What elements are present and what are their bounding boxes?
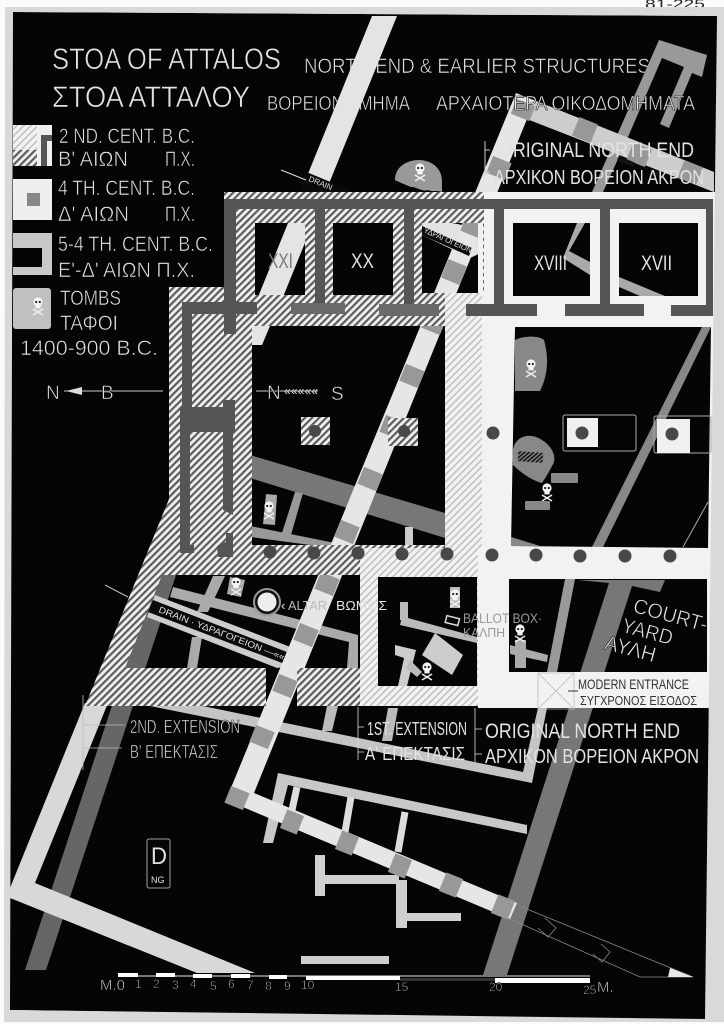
tomb in court	[263, 494, 277, 525]
gray walls of the 2nd century stoa	[180, 199, 713, 557]
lower left stub	[187, 637, 202, 668]
legend text: 4 TH. CENT. B.C.	[58, 177, 195, 200]
pier outline east court 2	[654, 416, 711, 453]
legend text: TOMBS	[60, 287, 121, 310]
gray wall in room XVIII	[563, 223, 590, 275]
inner north structure	[263, 773, 527, 843]
scale bar: 25	[583, 983, 597, 997]
original north end wall	[145, 705, 547, 783]
ballot box greek: ΚΑΛΠΗ	[463, 625, 505, 640]
wall stubs	[322, 706, 338, 731]
main title greek: ΣΤΟΑ ΑΤΤΑΛΟΥ	[52, 81, 250, 114]
ballot box label: BALLOT BOX·	[463, 610, 542, 626]
large gray wall right	[483, 580, 665, 975]
room numerals: XVII	[641, 252, 672, 275]
drain black notch	[452, 223, 483, 232]
drain label in room XIX	[422, 226, 472, 256]
legend text: Δ' ΑΙΩΝ	[58, 203, 129, 226]
lower right post	[515, 640, 526, 668]
legend swatch tombs	[13, 288, 51, 329]
main title english: STOA OF ATTALOS	[52, 43, 281, 76]
second extension label	[83, 695, 240, 770]
partition bar XXI-XX	[291, 303, 345, 314]
north arrow greek: B	[101, 383, 114, 404]
lower isolated walls	[315, 855, 461, 928]
dark hatched extension	[85, 192, 484, 706]
court stub	[282, 492, 303, 535]
first extension label: Α' ΕΠΕΚΤΑΣΙΣ	[365, 744, 465, 764]
skull right room	[422, 662, 432, 680]
scale bar: 7	[247, 978, 254, 992]
long chain wall with gray blocks	[226, 93, 714, 919]
right room block	[422, 633, 463, 675]
drain black strip	[148, 600, 292, 666]
courtyard thin wall	[547, 579, 575, 672]
legend text: 5-4 TH. CENT. B.C.	[58, 233, 213, 256]
legend swatch 4th century	[13, 179, 52, 220]
partition bar XVIII-XVII	[565, 304, 644, 316]
tomb court east upper	[515, 337, 547, 391]
pier white 2	[657, 419, 690, 453]
tail projected north end of chain	[510, 905, 693, 977]
north arrow court: «««««	[284, 384, 318, 398]
courtyard label: YARD	[619, 614, 675, 650]
inner stubs	[292, 787, 405, 852]
drain label band in room XIX	[422, 223, 483, 258]
scale bar: 9	[284, 979, 291, 993]
modern entrance	[538, 673, 697, 709]
north wall upper	[182, 302, 192, 407]
second extension wall	[10, 703, 255, 973]
tomb top	[395, 160, 442, 192]
signature monogram	[147, 839, 170, 888]
scale bar: 8	[265, 979, 272, 993]
north arrow court: N	[267, 383, 281, 404]
modern entrance: MODERN ENTRANCE	[578, 676, 689, 692]
tomb court east lower	[512, 436, 554, 483]
altar label: ‹	[281, 598, 285, 613]
skull lower right	[515, 624, 525, 642]
north thick bar	[180, 400, 235, 432]
top arm of the chain wall in lighter gray	[527, 101, 714, 192]
left room wall	[224, 199, 236, 334]
drain channel	[147, 595, 300, 668]
scale bar: 20	[489, 980, 503, 994]
scale bar: 15	[395, 980, 409, 994]
room numerals: XXI	[268, 250, 293, 273]
ballot box	[445, 616, 460, 626]
signature monogram: NG	[151, 875, 164, 885]
lower left room band	[170, 587, 358, 668]
legend swatch 2nd century	[13, 125, 52, 166]
partition wall XVIII-XVII	[600, 199, 610, 305]
pier outline east court 1	[563, 415, 636, 451]
original north end label lower	[485, 720, 699, 768]
north inner wall	[223, 432, 233, 515]
original north end label top: ORIGINAL NORTH END	[499, 139, 694, 162]
room numerals	[268, 250, 672, 275]
legend text: Π.Χ.	[165, 203, 195, 226]
north arrow greek	[46, 383, 163, 404]
legend swatch 5-4th century	[13, 233, 52, 275]
drain text in room XIX: ΥΔΡΑΓΟΓΕΙΟΝ	[422, 226, 474, 255]
gray wall in room XVII	[619, 277, 665, 296]
right room lower wall	[395, 645, 416, 686]
right room band	[400, 612, 477, 643]
right room stub	[400, 602, 408, 620]
scale bar: 5	[210, 979, 217, 993]
second extension label: Β' ΕΠΕΚΤΑΣΙΣ	[130, 742, 218, 762]
light hatched extension	[360, 293, 482, 706]
partition bar XX-XIX	[379, 304, 439, 316]
courtyard label: COURT-	[631, 595, 710, 636]
partition bar XIX-XVIII	[466, 304, 537, 316]
wall stub	[382, 708, 398, 741]
scale bar: M.	[597, 979, 614, 996]
skull with bars	[525, 473, 578, 510]
legend text: Ε'-Δ' ΑΙΩΝ Π.Χ.	[58, 259, 195, 282]
pier west	[301, 417, 330, 445]
room numerals: XVIII	[534, 252, 567, 275]
drain pointer at top	[281, 170, 352, 193]
right wall	[706, 199, 713, 316]
top right gray structure	[592, 40, 707, 192]
large gray wall left	[25, 575, 176, 970]
partition wall XIX-XVIII	[494, 199, 504, 305]
subtitle english: NORTH END & EARLIER STRUCTURES	[304, 55, 650, 78]
court corner wedge	[511, 537, 540, 546]
tomb in right room	[450, 587, 460, 608]
small block	[217, 533, 233, 557]
first extension label: 1ST. EXTENSION	[367, 719, 467, 739]
signature monogram: D	[151, 843, 167, 870]
north wall lower	[180, 432, 194, 553]
partition wall XXI-XX	[315, 199, 325, 304]
legend text: 2 ND. CENT. B.C.	[59, 125, 195, 148]
scale triangle	[668, 968, 693, 977]
pier white 1	[567, 418, 598, 447]
legend text: ΤΑΦΟΙ	[60, 312, 118, 335]
north arrow court	[256, 383, 344, 405]
original north end label top	[485, 139, 704, 189]
scale bar: 10	[301, 978, 315, 992]
court gray band	[250, 455, 445, 538]
scale bar: 6	[228, 977, 235, 991]
scale bar: 3	[172, 978, 179, 992]
first extension label	[358, 707, 482, 764]
courtyard gray diagonal	[592, 327, 711, 547]
courtyard label	[602, 590, 710, 678]
subtitle greek: ΒΟΡΕΙΟΝ ΤΜΗΜΑ	[267, 93, 411, 115]
legend text	[20, 125, 213, 360]
top wall	[224, 199, 713, 209]
altar label	[281, 598, 387, 613]
scale bar: M.0	[100, 977, 125, 994]
scale bar: 4	[190, 977, 197, 991]
slots in the top arm	[618, 158, 662, 176]
court lower band	[250, 526, 345, 545]
altar label: ΒΩΜΟΣ	[336, 598, 387, 613]
scale bar: 2	[153, 977, 160, 991]
scale bar	[100, 973, 614, 997]
modern entrance: ΣΥΓΧΡΟΝΟΣ ΕΙΣΟΔΟΣ	[580, 693, 697, 708]
lower right cross wall	[510, 645, 548, 662]
subtitle greek right: ΑΡΧΑΙΟΤΕΡΑ ΟΙΚΟΔΟΜΗΜΑΤΑ	[436, 93, 696, 115]
left T bar	[182, 302, 257, 314]
north arrow court: S	[331, 384, 344, 405]
court light stub	[405, 527, 413, 545]
gray blocks on chain wall	[224, 99, 703, 920]
lower left stubs	[197, 576, 225, 612]
second extension label: 2ND. EXTENSION	[130, 717, 240, 737]
legend text: Β' ΑΙΩΝ	[58, 148, 128, 171]
altar label: ALTAR	[288, 598, 327, 613]
drain label: DRAIN · ΥΔΡΑΓΟΓΕΙΟΝ —«««	[157, 605, 292, 664]
drain pointer at top: DRAIN	[307, 175, 334, 192]
courtyard label: ΑΥΛΗ	[602, 631, 658, 667]
lower isolated wall bar	[301, 956, 389, 964]
room numerals: XX	[351, 250, 374, 273]
white 4th century stoa	[478, 192, 724, 708]
columns	[264, 425, 678, 562]
legend text: Π.Χ.	[165, 148, 195, 171]
tomb in lower left room	[227, 577, 245, 597]
stray arrow	[105, 585, 128, 597]
pier east	[388, 418, 418, 446]
right room diamond	[406, 660, 422, 677]
right partition bar	[671, 305, 711, 316]
north arrow greek: N	[46, 383, 60, 404]
altar	[254, 589, 280, 615]
legend text: 1400-900 B.C.	[20, 337, 158, 360]
original north end label lower: ORIGINAL NORTH END	[485, 720, 680, 743]
partition wall XX-XIX	[404, 199, 414, 305]
court piers	[301, 415, 711, 453]
scale bar: 1	[135, 977, 142, 991]
thin line in east court	[683, 502, 708, 547]
diagonal band from top	[250, 16, 397, 345]
